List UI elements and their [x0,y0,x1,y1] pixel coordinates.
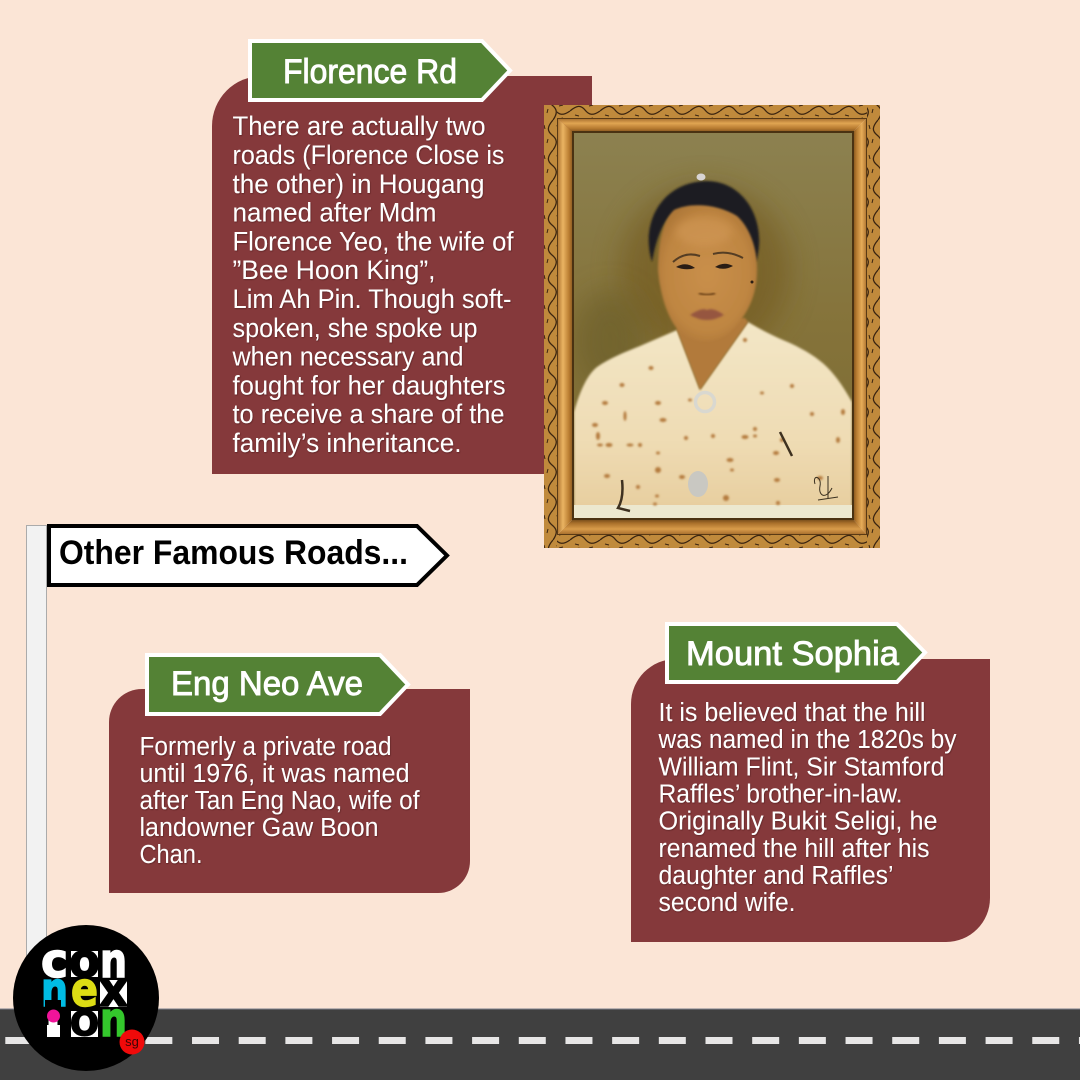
body text: Florence Rd: Lim Ah Pin. Though soft- [232,284,512,314]
signature [814,476,838,500]
sign: Mount Sophia [667,624,925,682]
logo: connexion.sg: c [41,934,68,989]
body text: Florence Rd: the other) in Hougang [232,169,484,199]
brooches [688,392,714,497]
panel: Florence Rd [212,76,592,474]
body text: Florence Rd: There are actually two [232,111,486,141]
sign: Other Famous Roads: Other Famous Roads... [59,534,408,572]
logo: connexion.sg: o [69,993,100,1048]
facial features [673,253,754,320]
body text: Eng Neo Ave: until 1976, it was named [140,760,410,788]
painted figure [574,133,852,518]
body text: Eng Neo Ave [140,733,420,869]
body text: Florence Rd: to receive a share of the [232,399,504,429]
signpost [26,526,46,976]
panel: Eng Neo Ave [109,689,470,893]
hair ornament [696,174,706,180]
badge: sg: sg [125,1034,139,1049]
body text: Florence Rd: fought for her daughters [232,370,506,400]
sign: Eng Neo Ave [147,655,408,714]
sign: Eng Neo Ave: Eng Neo Ave [171,665,363,703]
body text: Mount Sophia: Raffles’ brother-in-law. [658,780,902,808]
body text: Florence Rd: spoken, she spoke up [232,313,478,343]
logo: connexion.sg: e [71,963,98,1018]
logo: connexion.sg: x [99,963,128,1018]
sign: Mount Sophia: Mount Sophia [686,635,899,673]
body text: Eng Neo Ave: Formerly a private road [140,733,392,761]
body text: Florence Rd: when necessary and [232,342,464,372]
logo: connexion.sg: i [46,1005,60,1045]
portrait: framed painting of Mdm Florence Yeo [544,105,880,548]
body text: Eng Neo Ave: landowner Gaw Boon [140,814,378,842]
sign: Other Famous Roads [49,526,447,585]
body text: Mount Sophia: It is believed that the hill [658,699,926,727]
logo: connexion.sg: o [69,934,100,989]
body text: Florence Rd: family’s inheritance. [232,428,462,458]
panel: Mount Sophia [631,659,990,942]
badge: sg [120,1030,144,1054]
face [658,205,757,341]
logo tile backgrounds [71,951,127,1037]
body text: Mount Sophia: Originally Bukit Seligi, he [658,808,938,836]
neck [677,318,748,390]
blouse prints [592,338,845,506]
body text: Florence Rd: Florence Yeo, the wife of [232,226,514,256]
logo: connexion.sg: n [100,993,127,1048]
stains [780,432,792,456]
hair [649,181,759,262]
body text: Mount Sophia: William Flint, Sir Stamford [658,754,944,782]
body text: Eng Neo Ave: Chan. [140,841,202,869]
sign: Florence Rd [250,41,510,100]
sign: Florence Rd: Florence Rd [283,53,457,91]
logo: connexion.sg: n [41,963,68,1018]
body text: Mount Sophia: daughter and Raffles’ [658,862,894,890]
blouse [574,322,852,518]
body text: Florence Rd: roads (Florence Close is [232,140,504,170]
logo: connexion.sg [13,925,159,1071]
road [0,1008,1080,1080]
body text: Mount Sophia: renamed the hill after his [658,835,930,863]
body text: Mount Sophia: was named in the 1820s by [658,726,957,754]
body text: Florence Rd [232,111,514,458]
logo: connexion.sg: n [100,934,127,989]
frame [544,105,880,548]
body text: Eng Neo Ave: after Tan Eng Nao, wife of [140,787,420,815]
body text: Florence Rd: named after Mdm [232,198,436,228]
body text: Florence Rd: ”Bee Hoon King”, [232,255,436,285]
body text: Mount Sophia: second wife. [658,889,796,917]
body text: Mount Sophia [658,699,957,917]
